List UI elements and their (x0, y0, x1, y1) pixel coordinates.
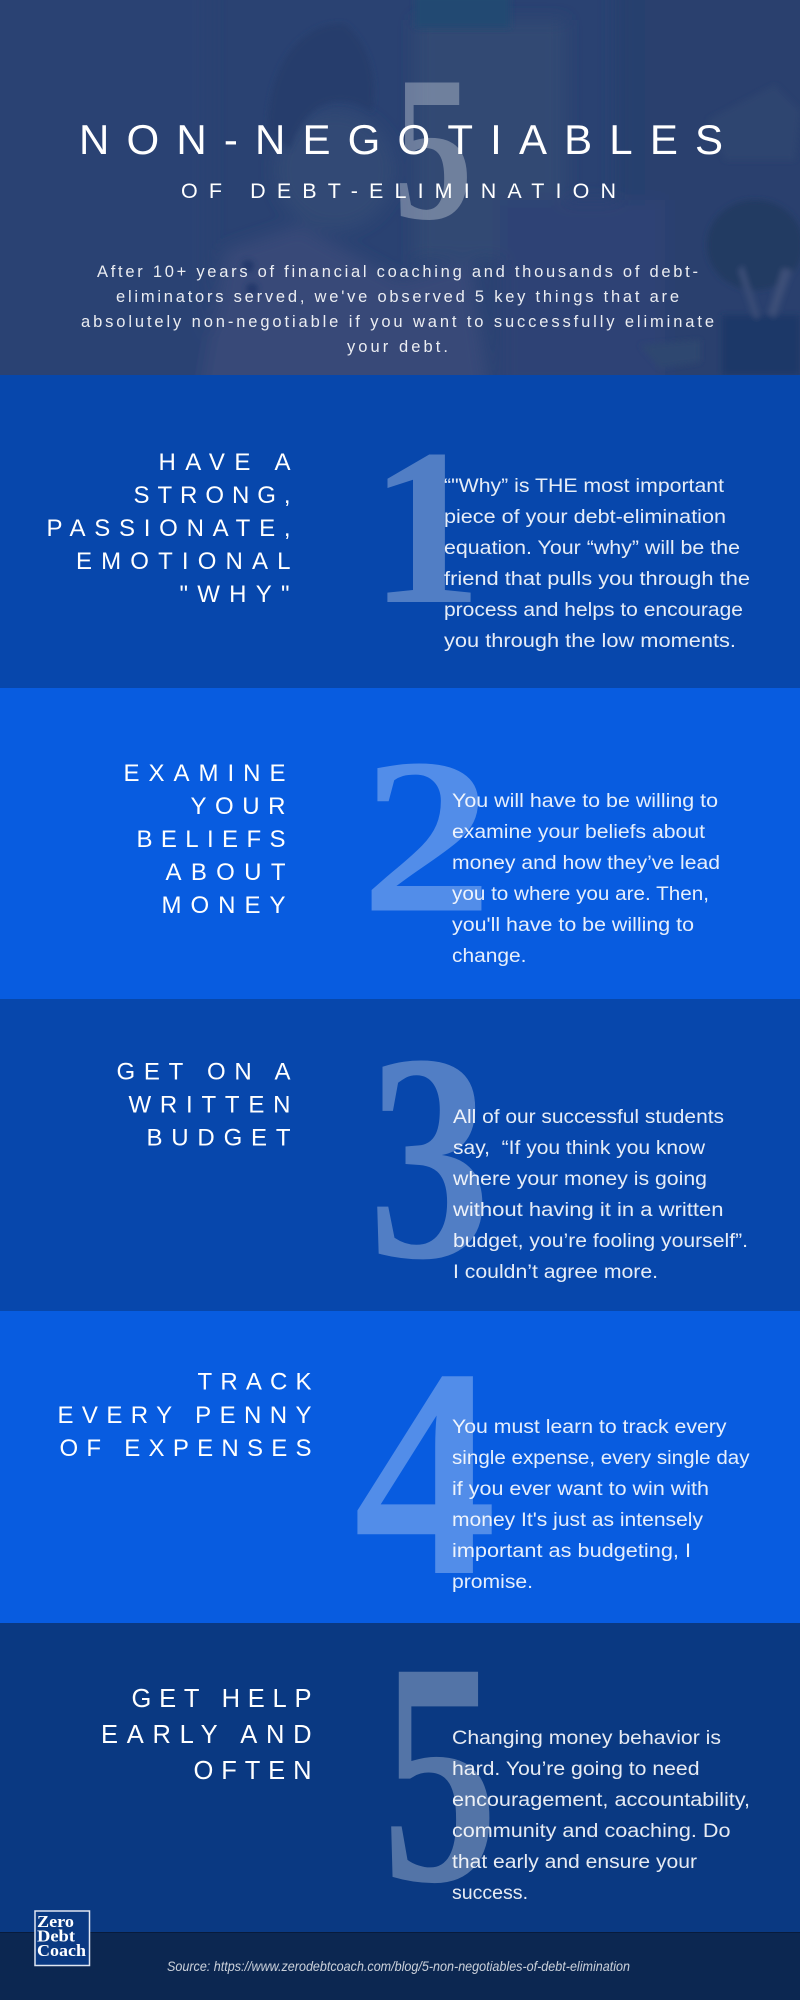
heading: step 5: EARLY AND (101, 1721, 312, 1749)
logo: Zero Debt Coach: Debt (37, 1926, 75, 1946)
heading: step 1: EMOTIONAL (76, 548, 290, 575)
body text: step 4: if you ever want to win with (452, 1479, 709, 1500)
heading: step 2 (124, 760, 286, 919)
body text: step 1: process and helps to encourage (444, 600, 743, 621)
heading: step 5: GET HELP (132, 1685, 312, 1713)
heading: step 3: BUDGET (146, 1124, 291, 1152)
heading: step 2: ABOUT (166, 859, 286, 886)
body text: step 1: equation. Your “why” will be the (444, 538, 740, 559)
heading: step 1: PASSIONATE, (46, 515, 290, 542)
body text: step 2: you'll have to be willing to (452, 915, 694, 936)
number 4: 4 (354, 1308, 497, 1638)
body text: step 4: promise. (452, 1572, 533, 1593)
number 3: 3 (368, 993, 491, 1321)
body text: step 1: friend that pulls you through the (444, 569, 750, 590)
heading: step 3: WRITTEN (128, 1092, 290, 1118)
body text: step 2: examine your beliefs about (452, 822, 706, 843)
body text: step 3: All of our successful students (453, 1107, 724, 1128)
subtitle: OF DEBT-ELIMINATION (181, 179, 616, 203)
heading: step 1 (46, 449, 290, 608)
big number 5: 5 (394, 34, 473, 263)
body text: step 4: money It's just as intensely (452, 1510, 704, 1531)
panel: step 2 (0, 688, 800, 999)
intro text: eliminators served, we've observed 5 key things that are (116, 288, 679, 306)
body text: step 3 (452, 1107, 748, 1283)
heading: step 3 (116, 1058, 291, 1152)
body text: step 2 (452, 791, 720, 967)
body text: step 3: say, “If you think you know (453, 1138, 705, 1159)
body text: step 1 (444, 476, 750, 652)
body text: step 1: you through the low moments. (444, 631, 736, 652)
heading: step 5 (101, 1685, 312, 1785)
source line: Source: https://www.zerodebtcoach.com/blog/5-non-negotiables-of-debt-elimination (167, 1958, 630, 1974)
intro text: your debt. (347, 338, 448, 356)
panel: header (0, 0, 800, 395)
heading: step 4 (58, 1368, 312, 1462)
body text: step 1: piece of your debt-elimination (444, 507, 726, 528)
body text: step 3: without having it in a written (452, 1200, 724, 1221)
body text: step 5: encouragement, accountability, (452, 1790, 750, 1811)
heading: step 2: EXAMINE (124, 760, 286, 787)
panel: step 3 (0, 993, 800, 1321)
body text: step 5: community and coaching. Do (452, 1821, 730, 1842)
background photo: woman at office desk (0, 0, 800, 395)
logo: Zero Debt Coach: Zero (37, 1912, 74, 1931)
logo: Zero Debt Coach: Coach (37, 1941, 87, 1960)
body text: step 4: important as budgeting, I (452, 1541, 691, 1562)
panel: step 5 (0, 1598, 800, 1950)
body text: step 2: You will have to be willing to (452, 791, 718, 812)
body text: step 3: budget, you’re fooling yourself”. (453, 1231, 748, 1252)
panel: footer (0, 1932, 800, 2000)
body text: step 5: Changing money behavior is (452, 1728, 721, 1749)
heading: step 2: MONEY (162, 892, 286, 919)
heading: step 2: YOUR (190, 793, 286, 820)
heading: step 1: "WHY" (180, 581, 290, 608)
intro text (81, 263, 714, 356)
logo: Zero Debt Coach (35, 1911, 90, 1966)
heading: step 4: EVERY PENNY (58, 1402, 312, 1429)
heading: step 4: TRACK (198, 1368, 312, 1396)
intro text: After 10+ years of financial coaching and thousands of debt- (97, 263, 698, 281)
heading: step 1: STRONG, (134, 482, 290, 509)
panel: step 1 (0, 375, 800, 688)
heading: step 3: GET ON A (116, 1058, 290, 1086)
title: NON-NEGOTIABLES (79, 116, 723, 163)
heading: step 4: OF EXPENSES (60, 1435, 312, 1462)
intro text: absolutely non-negotiable if you want to successfully eliminate (81, 313, 714, 331)
body text: step 5: hard. You’re going to need (452, 1759, 700, 1780)
number 2: 2 (360, 712, 493, 959)
heading: step 1: HAVE A (158, 449, 290, 476)
heading: step 5: OFTEN (194, 1757, 312, 1785)
number 1: 1 (369, 403, 482, 651)
body text: step 5 (452, 1728, 750, 1904)
heading: step 2: BELIEFS (136, 826, 286, 853)
body text: step 5: success. (452, 1883, 528, 1904)
body text: step 4: You must learn to track every (452, 1417, 727, 1438)
body text: step 2: money and how they’ve lead (452, 853, 720, 874)
body text: step 4 (452, 1417, 750, 1593)
body text: step 3: where your money is going (452, 1169, 707, 1190)
body text: step 4: single expense, every single day (452, 1448, 750, 1469)
number 5: 5 (382, 1598, 498, 1950)
body text: step 2: change. (452, 946, 526, 967)
body text: step 2: you to where you are. Then, (452, 884, 709, 905)
body text: step 1: “"Why” is THE most important (444, 476, 725, 497)
body text: step 5: that early and ensure your (452, 1852, 698, 1873)
body text: step 3: I couldn’t agree more. (453, 1262, 658, 1283)
panel: step 4 (0, 1308, 800, 1638)
